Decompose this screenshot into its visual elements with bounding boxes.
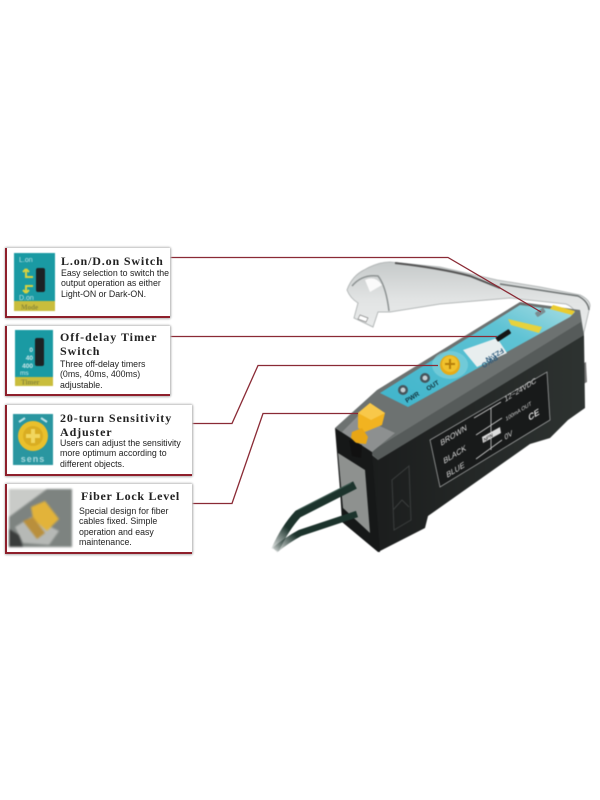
description — [60, 359, 146, 390]
icon: timer switch — [14, 329, 54, 387]
description: operation and easy — [79, 527, 154, 537]
description — [79, 506, 168, 547]
front end of housing — [335, 428, 380, 552]
heading: Fiber Lock Level — [81, 489, 180, 503]
description: Light-ON or Dark-ON. — [61, 289, 146, 299]
PWR and OUT indicators — [398, 373, 441, 405]
wiring diagram on side: CE — [528, 406, 540, 423]
icon: sensitivity knob — [12, 413, 54, 466]
wiring diagram on side: BLACK — [443, 443, 467, 466]
description: Users can adjust the sensitivity — [60, 438, 181, 448]
yellow strip on label — [508, 319, 542, 333]
description: Special design for fiber — [79, 506, 168, 516]
heading — [60, 411, 172, 439]
front face markings — [392, 466, 411, 530]
icon: timer switch: ms — [20, 370, 29, 377]
blue control label — [380, 305, 575, 407]
wiring diagram on side: 12~24VDC — [504, 375, 537, 404]
panel: Fiber Lock Level — [5, 484, 192, 554]
PWR and OUT indicators: OUT — [425, 379, 441, 393]
icon: mode switch: L.on — [19, 257, 33, 264]
icon: fiber lock photo — [7, 488, 74, 549]
grey top of housing — [335, 302, 584, 460]
wiring diagram on side: BLUE — [446, 460, 466, 480]
description — [60, 438, 181, 469]
icon: mode switch: D.on — [19, 295, 34, 302]
heading — [60, 330, 157, 358]
yellow fiber lock lever — [349, 403, 385, 458]
icon: mode switch — [13, 252, 56, 312]
description — [61, 268, 169, 299]
panel: 20-turn Sensitivity Adjuster — [5, 405, 192, 476]
heading: L.on/D.on Switch — [61, 254, 164, 268]
description: output operation as either — [61, 278, 161, 288]
description: maintenance. — [79, 537, 132, 547]
white model plate — [463, 338, 507, 369]
icon: timer switch: 400 — [22, 363, 33, 370]
wiring diagram on side: 0V — [504, 428, 513, 442]
description: Three off-delay timers — [60, 359, 145, 369]
heading: 20-turn Sensitivity — [60, 411, 172, 425]
icon: timer switch: 0 — [29, 347, 33, 354]
wiring diagram on side: BROWN — [440, 423, 468, 448]
description: adjustable. — [60, 380, 103, 390]
description: more optimum according to — [60, 448, 167, 458]
description: (0ms, 40ms, 400ms) — [60, 369, 140, 379]
icon: sensitivity knob: sens — [21, 454, 45, 464]
wiring diagram on side: NPN — [483, 432, 494, 444]
mode and timer slide switches — [495, 308, 546, 342]
sensor end mount at rear — [580, 362, 587, 386]
wiring diagram on side: 100mA OUT — [505, 401, 532, 423]
heading: Off-delay Timer — [60, 330, 157, 344]
panel: Off-delay Timer Switch — [5, 326, 170, 396]
panel: L.on/D.on Switch — [5, 248, 170, 318]
PWR and OUT indicators: PWR — [404, 391, 421, 405]
white model plate: RIKO — [479, 353, 499, 369]
black side of housing — [370, 322, 585, 552]
transparent lid — [347, 262, 590, 338]
heading: Switch — [60, 344, 100, 358]
wiring diagram on side — [430, 372, 550, 487]
heading: Adjuster — [60, 425, 113, 439]
icon: timer switch: 40 — [26, 355, 33, 362]
fiber cables — [275, 483, 357, 550]
description: Easy selection to switch the — [61, 268, 169, 278]
yellow sensitivity adjuster — [432, 351, 468, 379]
description: cables fixed. Simple — [79, 516, 157, 526]
description: different objects. — [60, 459, 124, 469]
white model plate: FZ1-N — [484, 346, 505, 363]
